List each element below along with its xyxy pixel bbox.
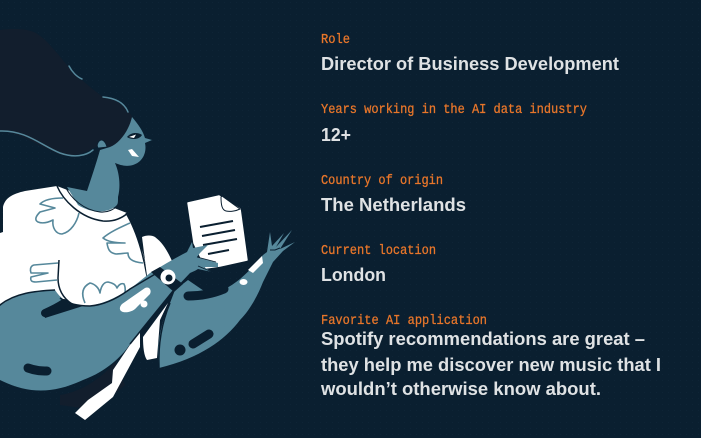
years working — [321, 102, 587, 145]
current location — [321, 243, 436, 285]
watch — [151, 267, 183, 292]
mouth — [128, 149, 139, 157]
document — [188, 195, 247, 268]
country of origin: Country of origin — [321, 173, 443, 189]
neck and face — [67, 117, 152, 212]
favorite AI application: Favorite AI application — [321, 313, 487, 329]
favorite AI application — [320, 313, 661, 399]
years working: Years working in the AI data industry — [321, 102, 587, 118]
torso fold lines — [58, 260, 72, 304]
country of origin — [321, 173, 466, 215]
favorite AI application: wouldn’t otherwise know about. — [320, 378, 601, 399]
role: Director of Business Development — [321, 53, 619, 74]
shirt wings — [30, 198, 143, 303]
profile details — [320, 32, 661, 399]
country of origin: The Netherlands — [321, 194, 466, 215]
shadow behind skirt — [60, 362, 125, 410]
white sleeve lower — [143, 303, 168, 360]
years working: 12+ — [321, 124, 351, 145]
white shirt tail — [75, 330, 140, 420]
current location: Current location — [321, 243, 436, 259]
right arm — [158, 230, 295, 368]
white sleeve shoulder — [142, 236, 172, 276]
left arm and hand — [0, 242, 218, 391]
eye — [127, 133, 142, 139]
role — [321, 32, 619, 74]
ear — [97, 140, 107, 148]
collar — [57, 186, 128, 221]
hair — [0, 29, 132, 155]
hair strands — [0, 66, 128, 156]
illustration: woman holding a document — [0, 29, 295, 420]
role: Role — [321, 32, 350, 48]
favorite AI application: they help me discover new music that I — [321, 354, 661, 375]
shirt — [0, 186, 149, 320]
current location: London — [321, 264, 386, 285]
favorite AI application: Spotify recommendations are great – — [321, 328, 645, 349]
